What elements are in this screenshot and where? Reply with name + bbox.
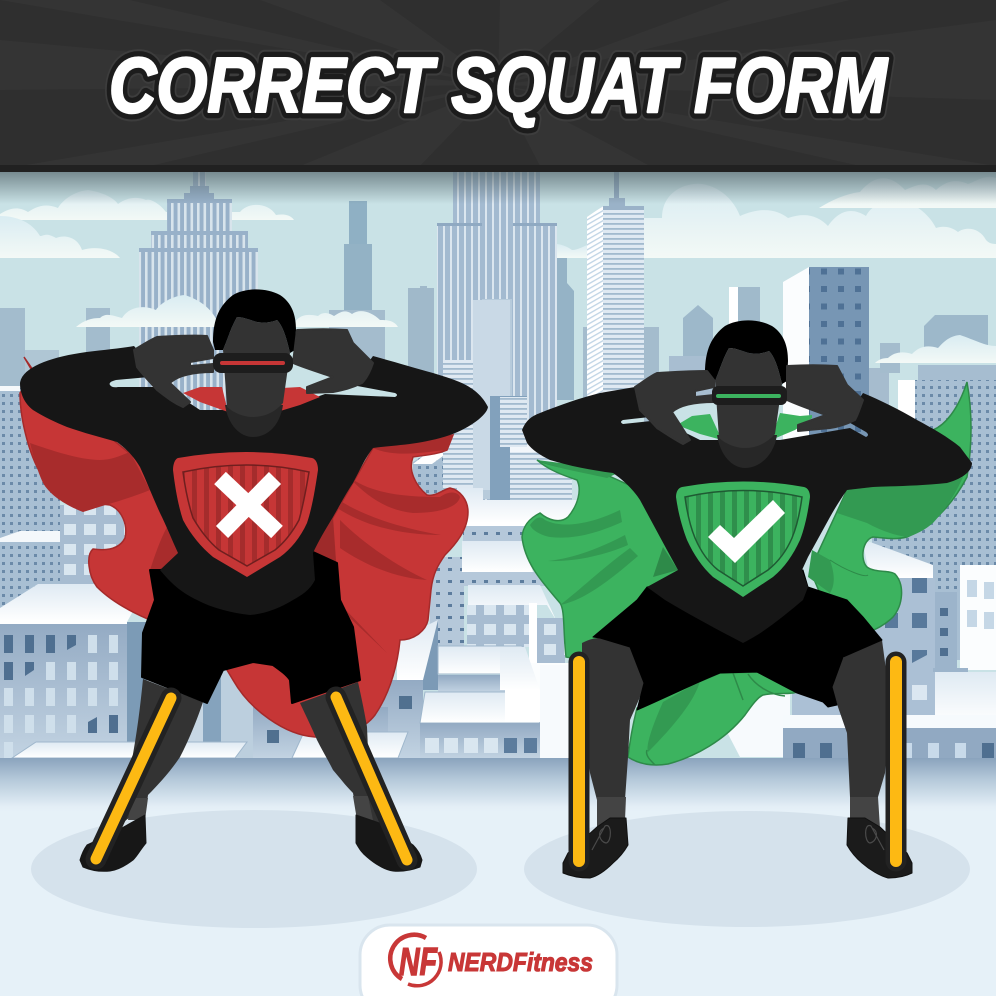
visor light (716, 394, 781, 398)
hair (705, 320, 788, 384)
left shoe (563, 818, 628, 878)
neck (717, 435, 777, 468)
knee guide line: left (568, 662, 590, 861)
face (715, 348, 782, 448)
visor (213, 353, 293, 373)
right hand (787, 365, 863, 431)
sky background (0, 165, 996, 765)
shield emblem: X (173, 452, 318, 577)
left sock (128, 798, 148, 820)
right sock (850, 797, 880, 828)
collar (677, 413, 812, 440)
clouds behind the skyline (0, 177, 996, 258)
knee guide line: right (336, 697, 407, 860)
header banner (0, 0, 996, 204)
figure: incorrect squat, knees caving in (red) (20, 289, 488, 871)
logo plate (360, 925, 617, 996)
black shorts (593, 570, 882, 710)
face (223, 317, 290, 417)
black shirt and arms (20, 346, 488, 615)
figure: correct squat, knees out (green) (522, 320, 972, 878)
foreground rooftops and buildings (0, 488, 996, 759)
shield emblem: check mark (676, 482, 810, 597)
left sock (597, 797, 626, 828)
black shirt and arms (522, 387, 972, 643)
logo: NF roundel (390, 935, 441, 986)
cloud bands in front of the skyline (76, 295, 996, 363)
green cape (522, 382, 971, 765)
red cape (20, 357, 468, 737)
knee guide line: right (886, 662, 906, 861)
right shoe (356, 815, 422, 871)
hair (213, 289, 296, 353)
right side buildings (500, 647, 540, 690)
ground shadow: left figure (31, 810, 477, 928)
neck (225, 405, 283, 437)
ground shadow: right figure (524, 811, 970, 927)
right hand (293, 329, 373, 393)
black shorts (142, 552, 360, 703)
rooftop floor (0, 758, 996, 996)
left hand (134, 336, 213, 407)
mid-ground buildings (0, 300, 996, 660)
right sock (353, 796, 373, 820)
collar (183, 387, 320, 412)
left leg (582, 638, 644, 800)
visor (712, 386, 787, 405)
right shoe (847, 818, 912, 878)
right leg (832, 640, 890, 797)
visor light (220, 361, 285, 365)
left shoe (80, 815, 146, 871)
left hand (635, 371, 714, 444)
shoe laces: right (866, 825, 884, 850)
left leg (100, 679, 203, 842)
logo: NF roundel: NF (399, 941, 438, 984)
right leg (300, 682, 395, 835)
shoe laces: left (592, 825, 610, 850)
logo: wordmark: NERDFitness (448, 947, 593, 977)
far skyline buildings (0, 172, 996, 503)
knee guide line: left (96, 698, 171, 859)
